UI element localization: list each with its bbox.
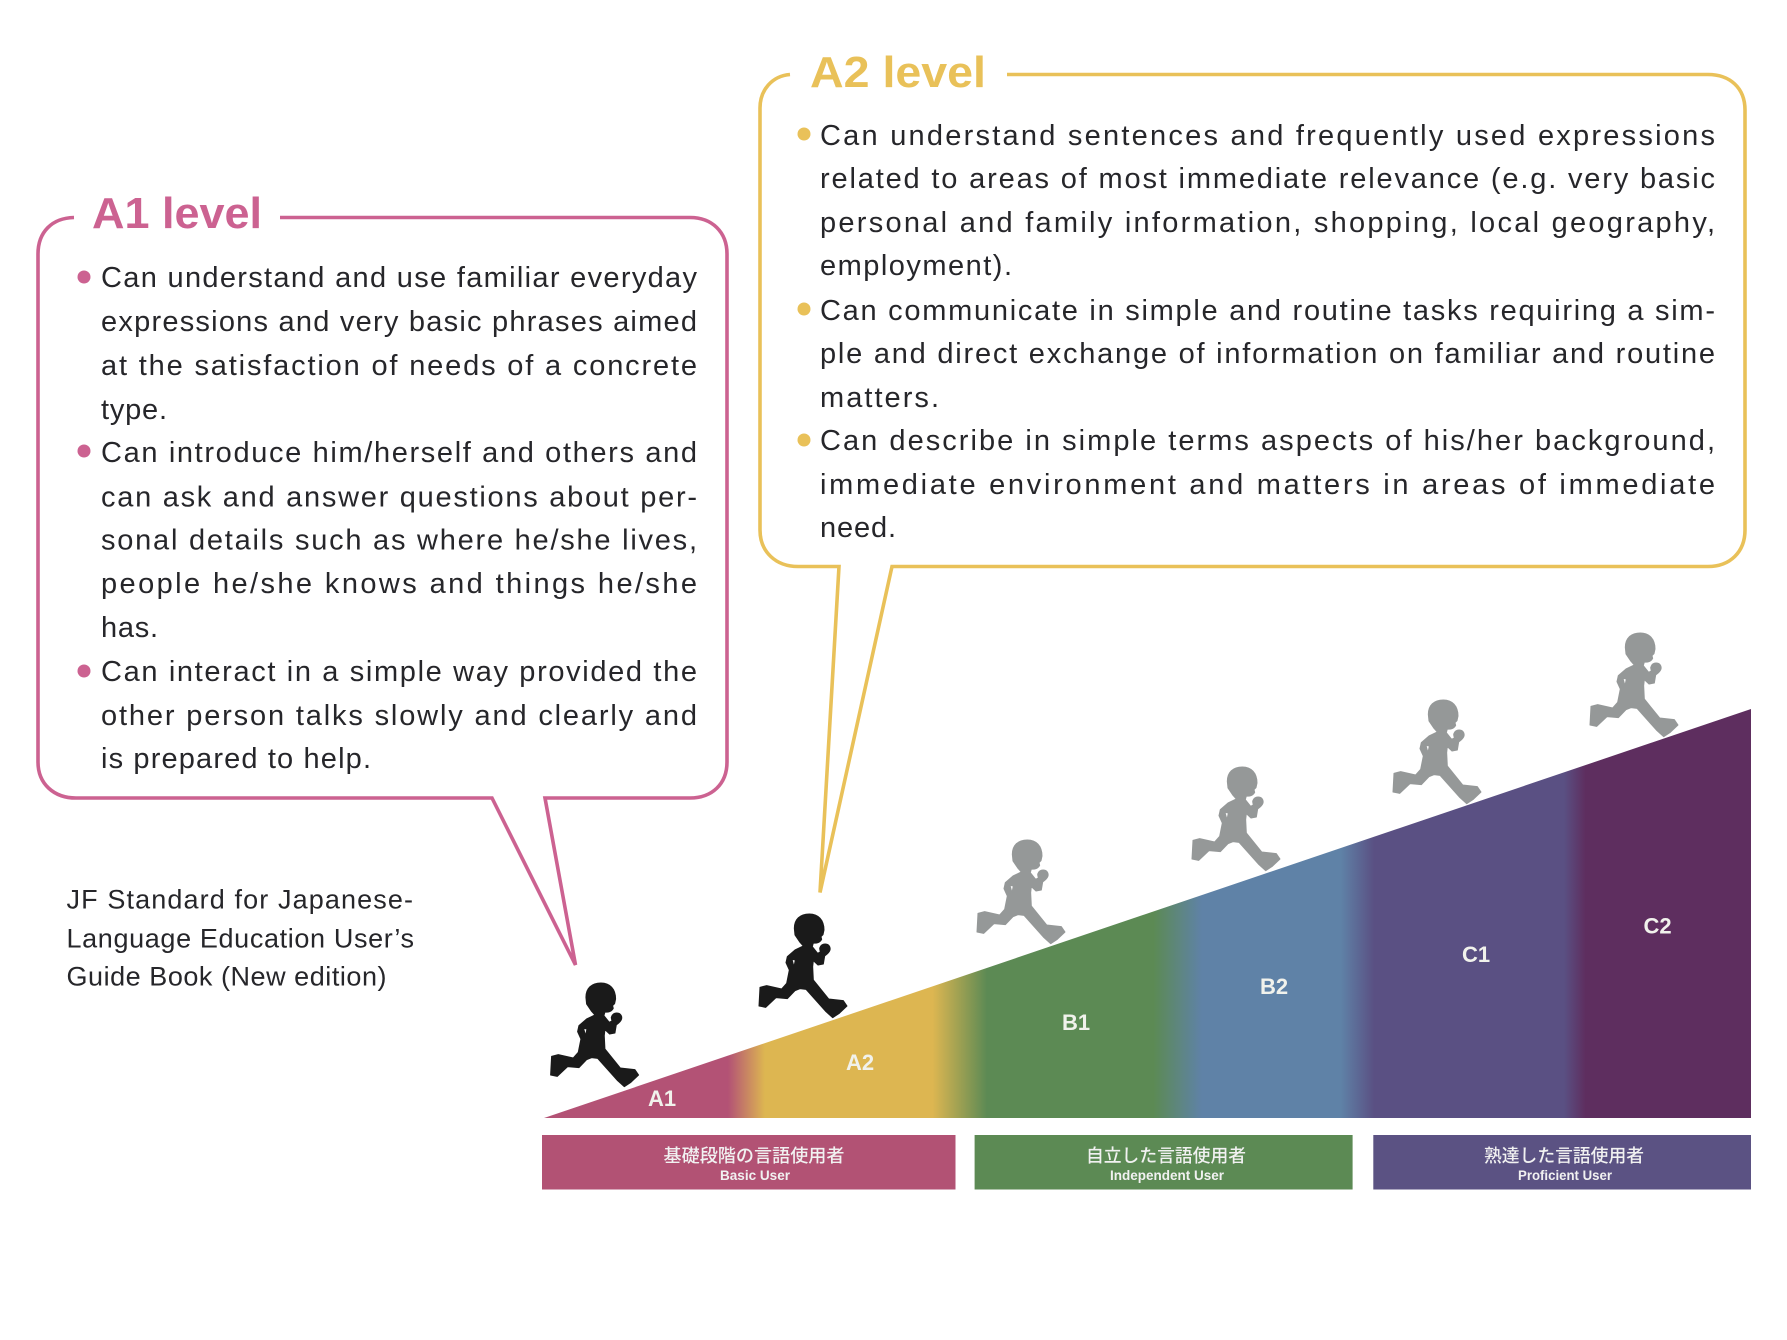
gradient triangle <box>544 709 1751 1118</box>
text block: source note <box>66 884 414 992</box>
heading: A2 level: A2 level <box>810 48 986 97</box>
bar: Proficient User: 熟達した言語使用者 <box>1484 1146 1644 1166</box>
level labels: A1 <box>648 1086 676 1111</box>
level labels: C1 <box>1462 942 1490 967</box>
bullet list: A1 descriptors: Can understand and use familiar everyday <box>101 262 698 294</box>
panel: A1 level <box>38 189 727 965</box>
bullet list: A1 descriptors: can ask and answer questions about per- <box>101 482 697 514</box>
panel: A2 level <box>760 48 1745 892</box>
icon: runner C2 <box>1590 633 1678 737</box>
bar: Basic User: Basic User <box>720 1168 791 1183</box>
icon: runner C1 <box>1393 700 1481 804</box>
bullet list: A1 descriptors: Can interact in a simple way provided the <box>101 656 697 688</box>
level labels: C2 <box>1643 914 1672 938</box>
bullet list: A2 descriptors: related to areas of most immediate relevance (e.g. very basic <box>820 163 1715 195</box>
bullet list: A2 descriptors: need. <box>820 512 896 544</box>
bullet list: A2 descriptors: personal and family information, shopping, local geography, <box>820 207 1715 239</box>
level labels: B2 <box>1260 974 1288 999</box>
text block: source note: Language Education User’s <box>66 924 414 954</box>
bullet list: A1 descriptors <box>78 262 698 775</box>
bullet list: A1 descriptors: has. <box>101 612 158 644</box>
bullet list: A2 descriptors: Can understand sentences and frequently used expressions <box>820 120 1715 152</box>
bullet list: A2 descriptors: ple and direct exchange of information on familiar and routine <box>820 338 1715 370</box>
level labels <box>648 914 1672 1111</box>
bullet list: A1 descriptors: at the satisfaction of needs of a concrete <box>101 350 697 382</box>
speech bubble outline: A1 <box>38 218 727 965</box>
bullet list: A2 descriptors: employment). <box>820 250 1012 282</box>
speech bubble outline: A2 <box>760 74 1745 892</box>
bullet list: A1 descriptors: other person talks slowly and clearly and <box>101 700 697 732</box>
bullet list: A1 descriptors: is prepared to help. <box>101 743 371 775</box>
icon: runner B2 <box>1192 767 1280 871</box>
bullet list: A1 descriptors: sonal details such as where he/she lives, <box>101 524 697 556</box>
icon: runner A1 <box>551 983 639 1087</box>
text block: source note: Guide Book (New edition) <box>66 962 386 992</box>
bullet list: A1 descriptors: Can introduce him/herself and others and <box>101 437 697 469</box>
bar: Proficient User: Proficient User <box>1518 1168 1613 1183</box>
chart: level slope <box>544 709 1751 1118</box>
text block: source note: JF Standard for Japanese- <box>66 884 413 914</box>
bullet list: A2 descriptors: immediate environment and matters in areas of immediate <box>820 469 1715 501</box>
bar: Basic User: 基礎段階の言語使用者 <box>664 1146 844 1166</box>
bullet list: A1 descriptors: expressions and very basic phrases aimed <box>101 306 697 338</box>
bullet list: A2 descriptors <box>798 120 1715 544</box>
icon: runner A2 <box>759 914 847 1018</box>
bar: Proficient User <box>1373 1135 1751 1190</box>
bullet list: A2 descriptors: Can communicate in simple and routine tasks requiring a sim- <box>820 295 1715 327</box>
level labels: B1 <box>1062 1010 1090 1035</box>
heading: A1 level: A1 level <box>92 189 262 238</box>
bar: Independent User: 自立した言語使用者 <box>1086 1146 1246 1166</box>
bar: Independent User: Independent User <box>1110 1168 1225 1183</box>
bar: Basic User <box>542 1135 956 1190</box>
icon: runner B1 <box>977 840 1065 944</box>
bar: Independent User <box>975 1135 1353 1190</box>
bullet list: A2 descriptors: matters. <box>820 382 939 414</box>
bullet list: A2 descriptors: Can describe in simple terms aspects of his/her background, <box>820 425 1715 457</box>
bullet list: A1 descriptors: people he/she knows and things he/she <box>101 568 697 600</box>
level labels: A2 <box>846 1050 874 1075</box>
bullet list: A1 descriptors: type. <box>101 394 167 426</box>
